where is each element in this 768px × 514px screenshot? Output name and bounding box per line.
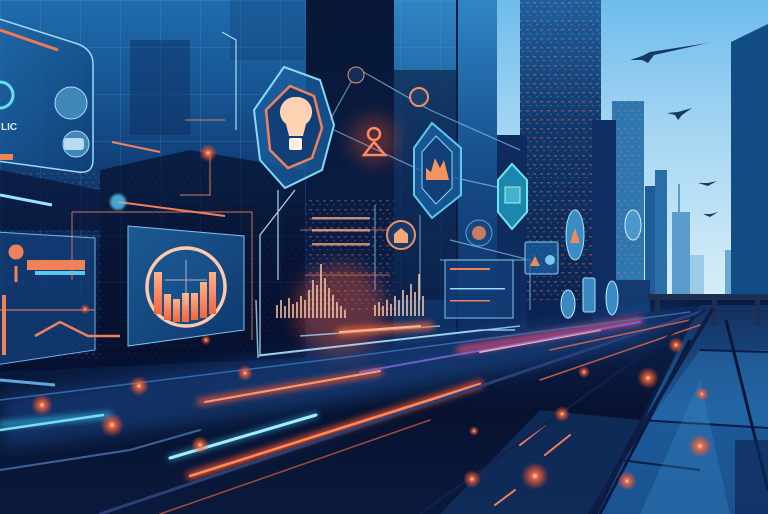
right tower [731,24,768,296]
flying birds and drones [630,43,718,217]
panel: top left icons: LIC [1,122,17,133]
icon: chart hexagon [414,123,461,218]
panel: bottom left gauge [0,232,120,365]
blue haze over midground [0,308,690,450]
small hud icons [348,67,641,318]
icon: light bulb hexagon [254,67,334,188]
reflective floor right [598,305,768,514]
line chart spikes [277,264,423,355]
centre reflective panel [440,410,640,514]
ground left [0,305,700,514]
dashed data rows [312,217,370,246]
circuit lines [0,32,530,385]
panel: top left icons [0,16,93,172]
panel: circular bar chart [128,226,244,346]
holographic base platform [256,300,520,358]
icon: person [350,116,398,164]
light trails [0,310,712,514]
panel: small dashboards [445,242,558,318]
icon: teal hexagon [498,164,527,229]
elevated bridge [648,294,768,326]
tall tower centre right [520,0,650,335]
centre towers [306,0,527,370]
distant skyline [612,101,735,296]
sky [497,0,768,296]
glowing points [31,144,712,491]
left building wall [0,0,306,375]
